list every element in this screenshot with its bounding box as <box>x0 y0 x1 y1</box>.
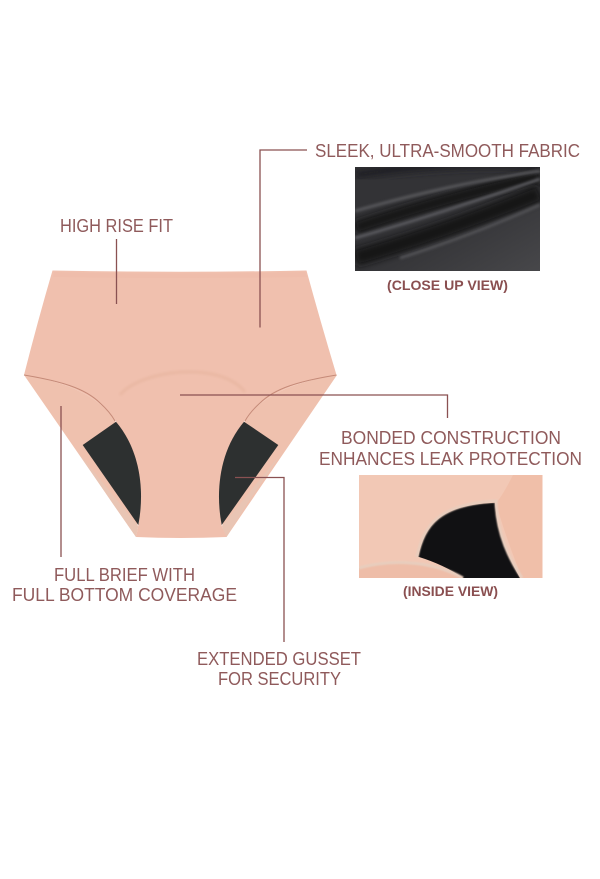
label: for security: FOR SECURITY <box>218 669 341 689</box>
brief leg panels <box>24 375 337 537</box>
caption: close up view: (CLOSE UP VIEW) <box>387 277 508 293</box>
callout line: fabric <box>260 150 307 328</box>
label: sleek fabric: SLEEK, ULTRA-SMOOTH FABRIC <box>315 141 580 161</box>
label: full bottom coverage: FULL BOTTOM COVERAGE <box>12 585 237 605</box>
fabric close-up photo <box>355 164 540 271</box>
label: leak protection: ENHANCES LEAK PROTECTION <box>319 449 582 469</box>
left gusset <box>83 422 141 525</box>
callout line: full brief <box>60 406 62 557</box>
waist shading <box>53 272 307 278</box>
label: full brief with: FULL BRIEF WITH <box>54 565 195 585</box>
caption: inside view: (INSIDE VIEW) <box>403 583 498 599</box>
brief main body <box>24 270 336 538</box>
bonded front arc <box>120 372 245 395</box>
product: high-rise brief <box>24 270 337 538</box>
callout line: high rise fit <box>116 239 118 304</box>
label: extended gusset: EXTENDED GUSSET <box>197 649 361 669</box>
sheer leg band <box>77 451 283 537</box>
right gusset <box>219 422 278 525</box>
label: bonded construction: BONDED CONSTRUCTION <box>341 428 561 448</box>
callout line: gusset <box>235 478 284 642</box>
leg seams <box>24 375 336 421</box>
inside view photo <box>359 475 543 578</box>
label: high rise fit: HIGH RISE FIT <box>60 216 173 236</box>
callout line: bonded construction <box>180 395 448 418</box>
